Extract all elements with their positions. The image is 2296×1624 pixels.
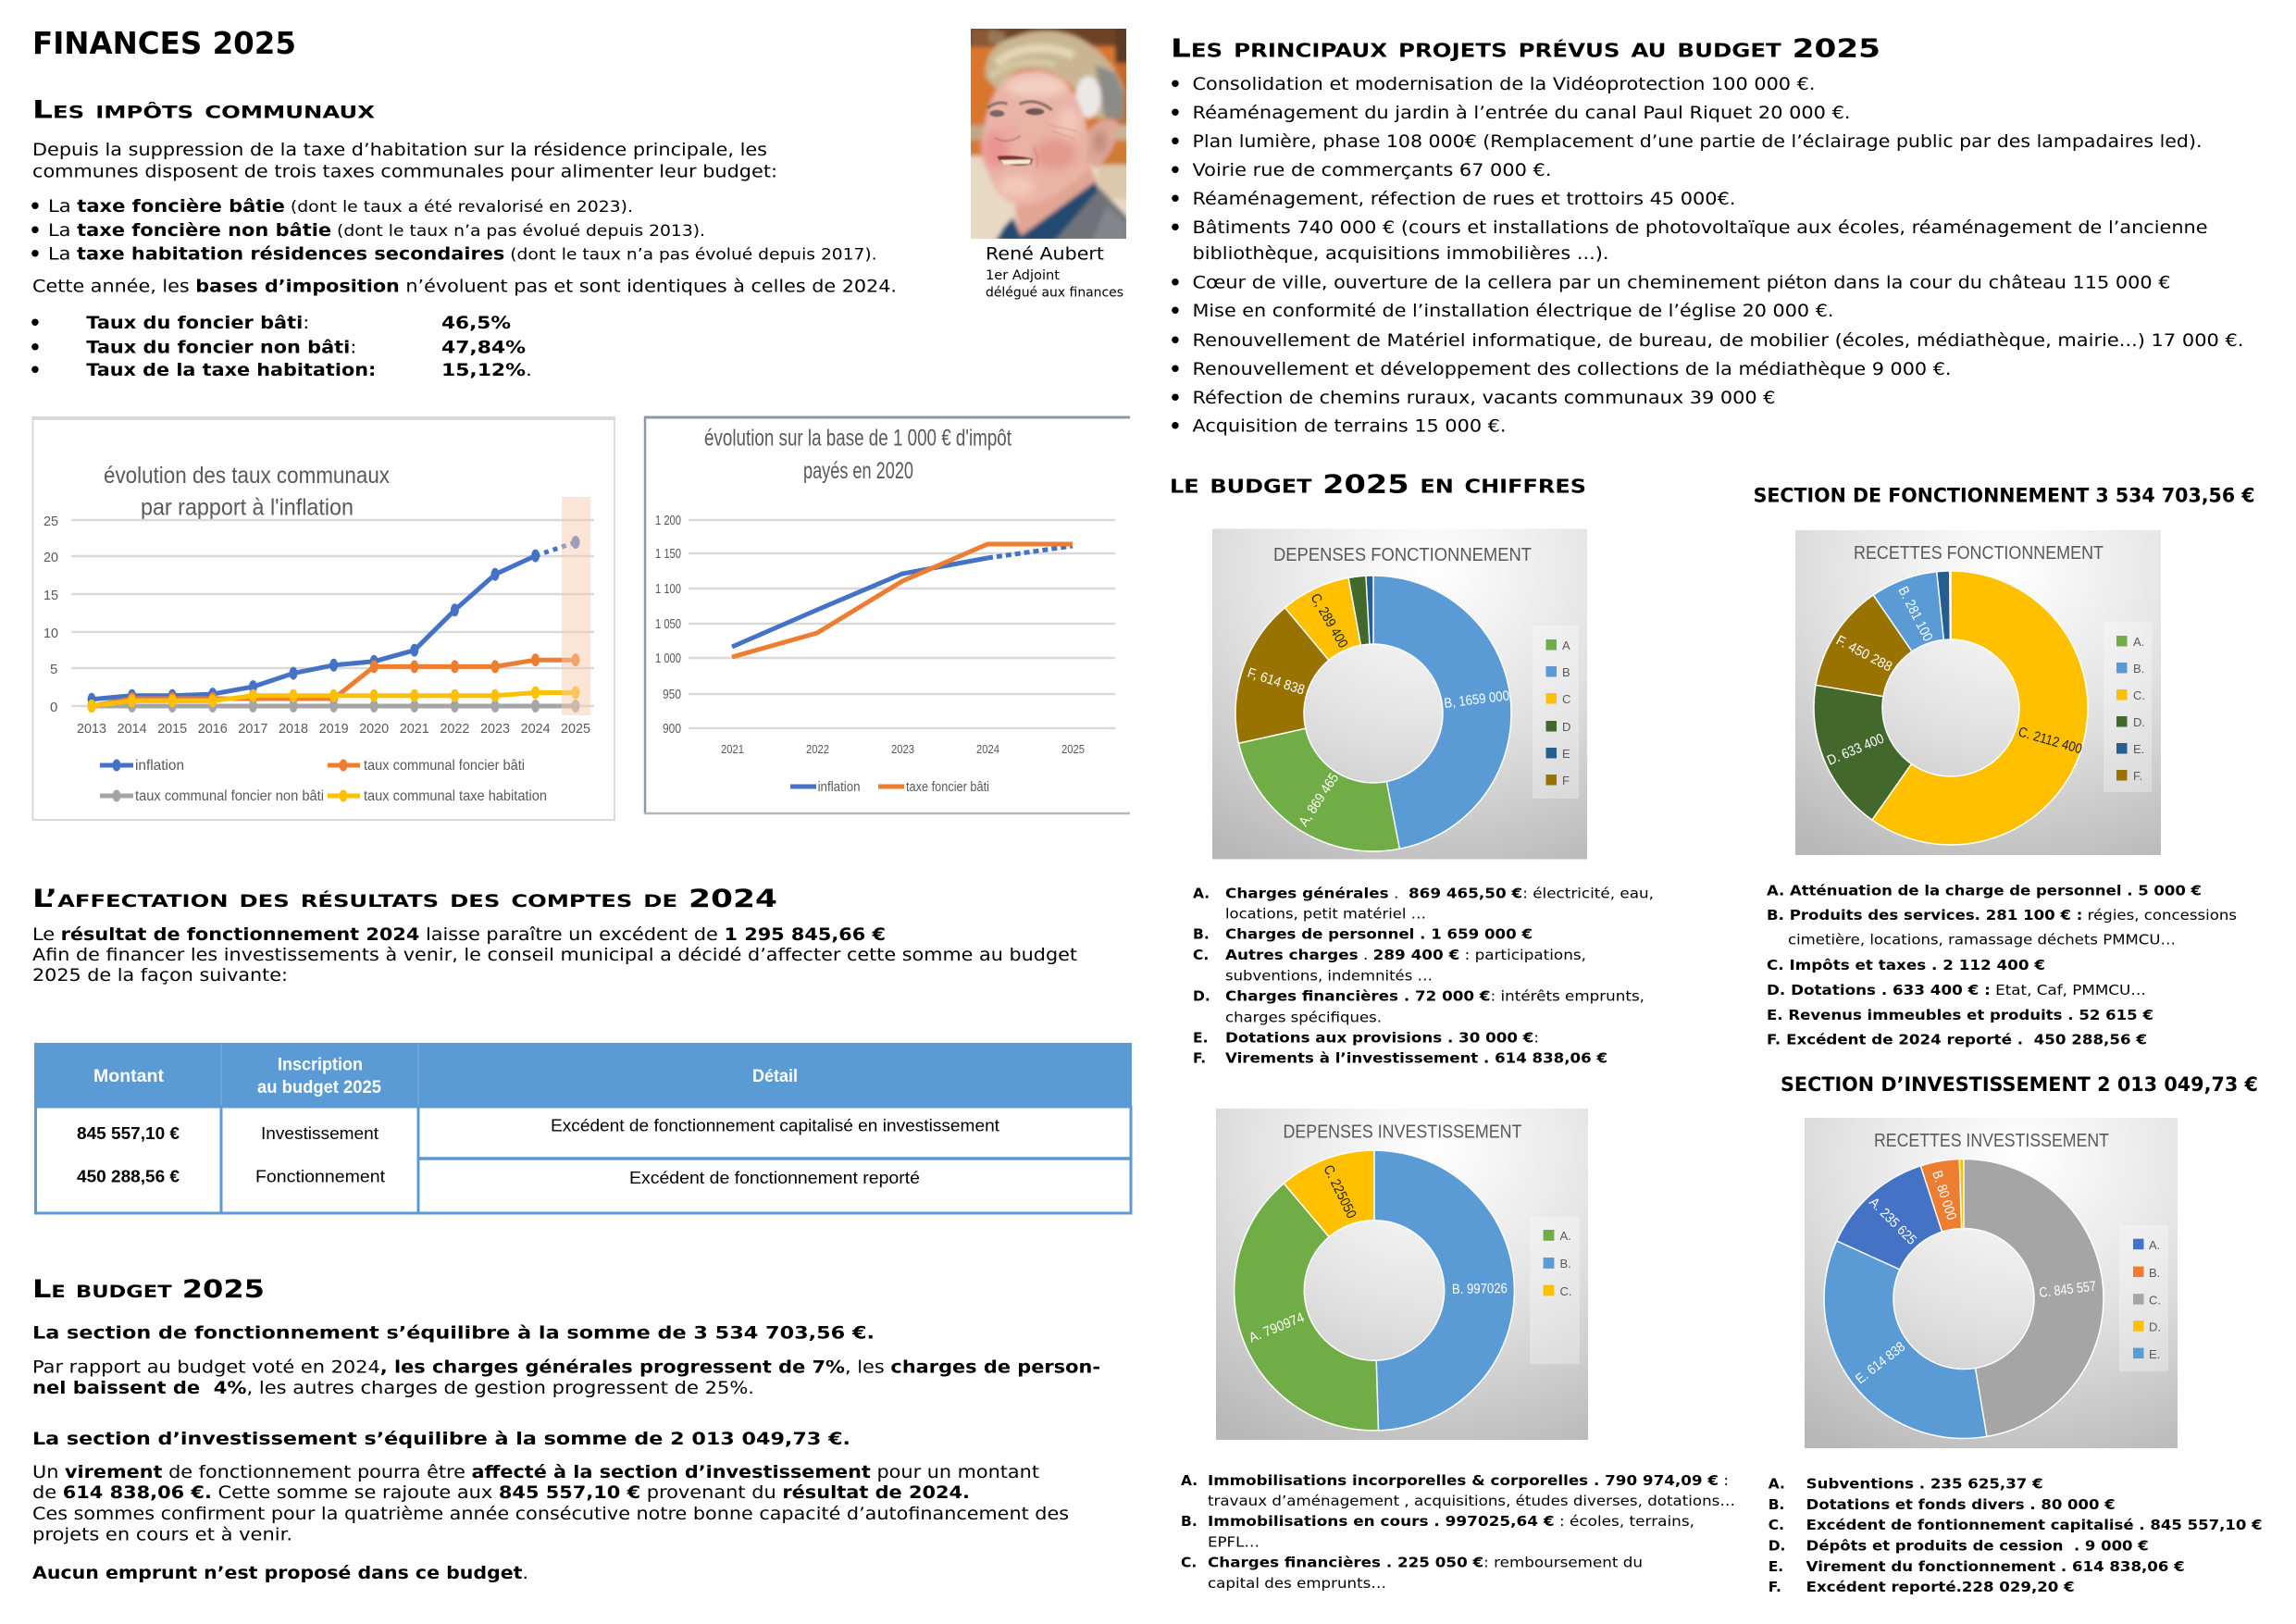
y axis labels: 1 150	[655, 546, 681, 562]
x axis labels: 2024	[976, 742, 999, 756]
x axis labels: 2022	[440, 721, 469, 737]
photo caption: délégué aux finances	[986, 285, 1123, 300]
data labels	[1825, 584, 2084, 769]
projects list: Renouvellement et développement des collections de la médiathèque 9 000 €.	[1192, 359, 1951, 379]
intro text: Depuis la suppression de la taxe d’habitation sur la résidence principale, les	[32, 140, 767, 160]
x axis labels: 2018	[279, 721, 308, 737]
projects list: Consolidation et modernisation de la Vidéoprotection 100 000 €.	[1192, 74, 1816, 94]
table: affectation	[34, 1043, 1132, 1213]
tax rates: Taux du foncier non bâti :	[86, 338, 356, 358]
tax rates: Taux du foncier bâti :	[86, 313, 309, 333]
projects list: Acquisition de terrains 15 000 €.	[1192, 416, 1507, 437]
list: recettes fonctionnement: F. Excédent de 2024 reporté . 450 288,56 €	[1767, 1031, 2147, 1048]
projects list: Mise en conformité de l’installation électrique de l’église 20 000 €.	[1192, 301, 1834, 321]
legend: A.	[1560, 1229, 1571, 1243]
projects list: Renouvellement de Matériel informatique, de bureau, de mobilier (écoles, médiathèque, mairie...) 17 000 €.	[1192, 330, 2243, 351]
list: recettes fonctionnement	[1767, 883, 2237, 1048]
data labels: A, 869 465	[1296, 771, 1342, 829]
bases d'imposition text: Cette année, les bases d’imposition n’évoluent pas et sont identiques à celles de 2024.	[32, 276, 897, 296]
legend: C	[1562, 692, 1570, 706]
chart legend: taux communal foncier non bâti	[135, 788, 324, 804]
chart legend	[790, 779, 989, 795]
tax rates: 15,12% .	[441, 360, 532, 380]
data labels	[1247, 1162, 1508, 1346]
legend: D.	[2149, 1320, 2161, 1334]
donut segments	[1848, 605, 2054, 811]
x axis labels: 2023	[891, 742, 914, 756]
y axis labels: 0	[50, 700, 57, 715]
legend: A	[1562, 638, 1570, 652]
legend: F	[1562, 774, 1570, 787]
list: recettes investissement: A.	[1769, 1475, 1785, 1492]
paragraph	[32, 924, 1077, 986]
legend: B.	[2149, 1266, 2160, 1280]
list: depenses investissement: C.	[1181, 1555, 1197, 1571]
x axis labels: 2014	[118, 721, 147, 737]
data labels	[1246, 590, 1510, 829]
list: depenses fonctionnement: A.	[1193, 885, 1210, 901]
heading: le budget 2025 en chiffres: le budget 2025 en chiffres	[1170, 468, 1586, 500]
data labels: E. 614 838	[1853, 1339, 1908, 1387]
projects list: Réaménagement du jardin à l’entrée du canal Paul Riquet 20 000 €.	[1192, 103, 1851, 123]
y axis labels: 25	[43, 514, 58, 529]
projects list: •	[1168, 215, 1183, 242]
row 2: Fonctionnement	[255, 1168, 385, 1186]
chart legend: taux communal foncier bâti	[364, 758, 525, 774]
legend	[1530, 1217, 1580, 1364]
tax rates: •	[28, 357, 43, 385]
closing statement: Aucun emprunt n’est proposé dans ce budget .	[32, 1563, 528, 1583]
list of three taxes: La taxe habitation résidences secondaires (dont le taux n’a pas évolué depuis 2017).	[48, 244, 877, 265]
chart: évolution sur la base de 1 000 €	[644, 416, 1130, 814]
data labels: F. 450 288	[1833, 633, 1894, 676]
photo caption: 1er Adjoint	[986, 268, 1061, 283]
list: depenses fonctionnement	[1193, 885, 1654, 1066]
heading: section de fonctionnement: SECTION DE FONCTIONNEMENT 3 534 703,56 €	[1754, 485, 2255, 507]
face shading	[983, 76, 1105, 197]
y axis labels: 1 050	[655, 616, 681, 632]
list: recettes investissement: Virement du fonctionnement . 614 838,06 €	[1806, 1558, 2185, 1575]
projects list: •	[1168, 328, 1183, 355]
paragraph investissement: projets en cours et à venir.	[32, 1525, 292, 1545]
list: recettes investissement: Excédent reporté.228 029,20 €	[1806, 1579, 2075, 1595]
section: l'affectation des résultats	[32, 885, 1077, 986]
data labels: B. 80 000	[1929, 1169, 1959, 1222]
intro text: communes disposent de trois taxes communales pour alimenter leur budget:	[32, 161, 777, 181]
list: depenses fonctionnement: E.	[1193, 1029, 1208, 1046]
legend: B.	[2133, 662, 2144, 676]
list: recettes fonctionnement: D. Dotations . 633 400 € : Etat, Caf, PMMCU…	[1767, 982, 2146, 998]
list: recettes investissement	[1769, 1475, 2263, 1595]
data labels: F, 614 838	[1246, 665, 1307, 699]
x axis labels: 2024	[521, 721, 551, 737]
paragraph fonctionnement: Par rapport au budget voté en 2024 , les charges générales progressent de 7% , les charges de person-	[32, 1357, 1100, 1377]
list: depenses fonctionnement: Charges générales . 869 465,50 € : électricité, eau,	[1225, 885, 1654, 901]
chart legend: taux communal taxe habitation	[364, 788, 547, 804]
tax rates: •	[28, 310, 43, 338]
panel: recettes fonctionnement donut	[1795, 530, 2161, 855]
chart title: RECETTES FONCTIONNEMENT	[1854, 543, 2104, 564]
list: recettes fonctionnement: B. Produits des services. 281 100 € : régies, concessions	[1767, 907, 2237, 924]
chart title: par rapport à l'inflation	[141, 495, 354, 521]
legend: C.	[2149, 1294, 2161, 1307]
legend: B.	[1560, 1257, 1571, 1271]
legend: A.	[2149, 1238, 2160, 1252]
x axis labels: 2025	[1061, 742, 1085, 756]
chart title	[104, 463, 390, 521]
row 2: 450 288,56 €	[77, 1168, 180, 1186]
y axis labels: 20	[43, 550, 58, 565]
legend: D.	[2133, 715, 2145, 729]
tax rates	[28, 310, 532, 385]
data labels: D. 633 400	[1825, 731, 1886, 769]
legend	[2104, 622, 2152, 792]
y axis labels: 10	[43, 626, 58, 641]
legend: F.	[2133, 769, 2142, 783]
x axis labels: 2013	[77, 721, 106, 737]
x axis labels: 2016	[198, 721, 228, 737]
chart legend: inflation	[818, 779, 861, 795]
list: depenses investissement: B.	[1181, 1513, 1198, 1530]
projects list: •	[1168, 71, 1183, 99]
x axis labels: 2022	[806, 742, 829, 756]
list: depenses fonctionnement: B.	[1193, 925, 1210, 942]
line: taux communal taxe habitation	[92, 692, 576, 706]
list: recettes investissement: B.	[1769, 1496, 1784, 1513]
list: recettes investissement: Dotations et fonds divers . 80 000 €	[1806, 1496, 2116, 1513]
line: inflation	[92, 542, 576, 700]
tax rates: Taux de la taxe habitation:	[86, 360, 376, 380]
line: taux communal foncier non bâti	[92, 703, 576, 709]
row 1: 845 557,10 €	[77, 1124, 180, 1143]
legend: D	[1562, 720, 1570, 734]
projects list: •	[1168, 129, 1183, 156]
x axis labels: 2025	[561, 721, 590, 737]
y axis labels: 1 100	[655, 581, 681, 597]
tax rates: 46,5%	[441, 313, 511, 333]
x axis labels: 2023	[480, 721, 510, 737]
legend: E.	[2133, 742, 2144, 756]
paragraph fonctionnement: nel baissent de 4% , les autres charges de gestion progressent de 25%.	[32, 1378, 754, 1398]
list: depenses investissement	[1181, 1472, 1735, 1592]
legend: A.	[2133, 635, 2144, 649]
list: depenses fonctionnement: Autres charges . 289 400 € : participations,	[1225, 947, 1586, 963]
table header	[34, 1043, 1132, 1107]
legend: E	[1562, 747, 1570, 761]
row 1: Excédent de fonctionnement capitalisé en investissement	[551, 1116, 999, 1134]
projects list	[1168, 71, 2243, 440]
list: depenses fonctionnement: locations, petit matériel …	[1225, 905, 1426, 922]
y axis labels	[43, 514, 58, 715]
chart legend	[100, 758, 547, 804]
x axis labels: 2015	[157, 721, 187, 737]
projects list: •	[1168, 157, 1183, 185]
projects list: •	[1168, 100, 1183, 128]
paragraph investissement: de 614 838,06 €. Cette somme se rajoute aux 845 557,10 € provenant du résultat de 2024.	[32, 1482, 970, 1503]
x axis labels	[721, 742, 1085, 756]
data labels: A. 790974	[1247, 1309, 1307, 1346]
paragraph: 2025 de la façon suivante:	[32, 965, 288, 986]
y axis labels: 5	[50, 662, 57, 677]
tax rates: 47,84%	[441, 338, 526, 358]
section: les principaux projets	[1168, 33, 2243, 440]
table header: Inscription	[278, 1056, 363, 1075]
panel: depenses fonctionnement donut	[1212, 529, 1587, 859]
chart title	[704, 426, 1011, 484]
legend: E.	[2149, 1347, 2160, 1361]
list: depenses investissement: capital des emprunts…	[1208, 1575, 1386, 1592]
projects list: Voirie rue de commerçants 67 000 €.	[1192, 160, 1551, 180]
heading: L’affectation des résultats des comptes de 2024	[32, 885, 777, 913]
list: depenses investissement: EPFL…	[1208, 1534, 1260, 1551]
data labels: C, 289 400	[1308, 590, 1351, 651]
list of three taxes: •	[28, 193, 43, 221]
y axis labels: 1 200	[655, 513, 681, 528]
heading: Les principaux projets prévus au budget 2025	[1171, 33, 1880, 63]
list: recettes fonctionnement: A. Atténuation de la charge de personnel . 5 000 €	[1767, 883, 2202, 899]
list: depenses investissement: Charges financières . 225 050 € : remboursement du	[1208, 1555, 1643, 1571]
data labels: B. 281 100	[1894, 584, 1936, 644]
data labels: C. 845 557	[2038, 1279, 2097, 1301]
list: depenses fonctionnement: Charges financières . 72 000 € : intérêts emprunts,	[1225, 988, 1644, 1005]
face details	[987, 102, 1076, 168]
paragraph investissement: Un virement de fonctionnement pourra être affecté à la section d’investissement pour un montant	[32, 1462, 1039, 1482]
list: depenses investissement: Immobilisations incorporelles & corporelles . 790 974,09 € :	[1208, 1472, 1729, 1489]
projects list: bibliothèque, acquisitions immobilières ...).	[1192, 243, 1608, 264]
list: recettes fonctionnement: C. Impôts et taxes . 2 112 400 €	[1767, 957, 2045, 973]
list of three taxes: •	[28, 217, 43, 245]
line: taux communal foncier bâti	[92, 660, 576, 706]
x axis labels: 2019	[319, 721, 349, 737]
list: depenses investissement: travaux d’aménagement , acquisitions, études diverses, dotations…	[1208, 1493, 1735, 1509]
list: recettes investissement: F.	[1769, 1579, 1781, 1595]
data labels	[1853, 1169, 2097, 1387]
projects list: •	[1168, 270, 1183, 298]
paragraph: Le résultat de fonctionnement 2024 laisse paraître un excédent de 1 295 845,66 €	[32, 924, 886, 945]
list: depenses fonctionnement: Virements à l’investissement . 614 838,06 €	[1225, 1049, 1607, 1066]
photo caption	[986, 244, 1123, 300]
row 2: Excédent de fonctionnement reporté	[629, 1169, 920, 1187]
2025 highlight band	[562, 497, 590, 715]
data labels: C. 2112 400	[2017, 725, 2084, 757]
chart title: RECETTES INVESTISSEMENT	[1874, 1131, 2109, 1151]
list: recettes fonctionnement: E. Revenus immeubles et produits . 52 615 €	[1767, 1007, 2153, 1023]
list: depenses fonctionnement: Dotations aux provisions . 30 000 € :	[1225, 1029, 1539, 1046]
photo: René Aubert portrait	[971, 29, 1126, 239]
legend	[2119, 1225, 2168, 1371]
heading: section d'investissement: SECTION D’INVESTISSEMENT 2 013 049,73 €	[1781, 1073, 2258, 1096]
projects list: •	[1168, 413, 1183, 440]
projects list: Bâtiments 740 000 € (cours et installations de photovoltaïque aux écoles, réaménagement de l’ancienne	[1192, 217, 2208, 238]
list: recettes investissement: D.	[1769, 1538, 1785, 1555]
section: le budget 2025	[32, 1275, 1100, 1583]
list: depenses investissement: Immobilisations en cours . 997025,64 € : écoles, terrains,	[1208, 1513, 1694, 1530]
y axis labels: 15	[43, 588, 58, 603]
line: inflation	[732, 546, 1073, 647]
list: depenses fonctionnement: D.	[1193, 988, 1210, 1005]
legend: B	[1562, 665, 1570, 679]
paragraph: Afin de financer les investissements à venir, le conseil municipal a décidé d’affecter cette somme au budget	[32, 945, 1077, 965]
donut segments	[1270, 610, 1477, 817]
legend: C.	[2133, 688, 2145, 702]
list: recettes investissement: C.	[1769, 1517, 1784, 1533]
list: depenses fonctionnement: Charges de personnel . 1 659 000 €	[1225, 925, 1533, 942]
list: recettes investissement: Subventions . 235 625,37 €	[1806, 1475, 2043, 1492]
list of three taxes: La taxe foncière non bâtie (dont le taux n’a pas évolué depuis 2013).	[48, 220, 705, 241]
subheading investissement: La section d’investissement s’équilibre à la somme de 2 013 049,73 €.	[32, 1429, 850, 1449]
paragraph fonctionnement	[32, 1357, 1100, 1398]
list of three taxes: •	[28, 241, 43, 268]
list: depenses investissement: A.	[1181, 1472, 1198, 1489]
legend: C.	[1560, 1284, 1571, 1298]
page title: FINANCES 2025	[32, 25, 296, 61]
row 1	[77, 1116, 999, 1143]
chart title: DEPENSES FONCTIONNEMENT	[1273, 545, 1532, 565]
chart title: DEPENSES INVESTISSEMENT	[1283, 1122, 1521, 1142]
list: recettes investissement: E.	[1769, 1558, 1783, 1575]
paragraph investissement	[32, 1462, 1069, 1545]
panel: recettes investissement donut	[1805, 1118, 2178, 1448]
subheading fonctionnement: La section de fonctionnement s’équilibre à la somme de 3 534 703,56 €.	[32, 1323, 875, 1344]
heading: Le budget 2025	[32, 1275, 265, 1304]
projects list: Réfection de chemins ruraux, vacants communaux 39 000 €	[1192, 388, 1775, 408]
donut segments	[1270, 1185, 1479, 1395]
x axis labels: 2020	[359, 721, 389, 737]
x axis labels: 2021	[721, 742, 744, 756]
data labels: B, 1659 000	[1443, 688, 1510, 712]
table header: Montant	[93, 1067, 165, 1086]
y axis labels: 950	[663, 687, 681, 702]
data labels: B. 997026	[1452, 1281, 1508, 1297]
section: les impôts communaux	[28, 96, 897, 385]
chart legend: taxe foncier bâti	[906, 779, 989, 795]
chart title: payés en 2020	[803, 458, 913, 484]
panel: depenses investissement donut	[1216, 1109, 1588, 1440]
legend	[1533, 626, 1579, 799]
projects list: Réaménagement, réfection de rues et trottoirs 45 000€.	[1192, 189, 1736, 209]
projects list: •	[1168, 186, 1183, 214]
projects list: •	[1168, 356, 1183, 384]
projects list: •	[1168, 298, 1183, 326]
x axis labels: 2017	[238, 721, 267, 737]
projects list: Cœur de ville, ouverture de la cellera par un cheminement piéton dans la cour du château 115 000 €	[1192, 272, 2171, 292]
y axis labels: 1 000	[655, 651, 681, 666]
intro text	[32, 140, 777, 181]
table header: au budget 2025	[257, 1078, 381, 1097]
line: taxe foncier bâti	[732, 544, 1073, 657]
list: recettes fonctionnement: cimetière, locations, ramassage déchets PMMCU…	[1788, 931, 2176, 948]
chart: évolution des taux communaux	[32, 416, 615, 820]
row 1: Investissement	[261, 1124, 379, 1143]
y axis labels: 900	[663, 721, 681, 737]
list of three taxes: La taxe foncière bâtie (dont le taux a été revalorisé en 2023).	[48, 196, 633, 217]
list: depenses fonctionnement: charges spécifiques.	[1225, 1009, 1382, 1025]
tax rates: •	[28, 335, 43, 363]
list: depenses fonctionnement: subventions, indemnités …	[1225, 968, 1433, 985]
x axis labels	[77, 721, 590, 737]
y axis labels	[655, 513, 681, 737]
data labels: C. 225050	[1320, 1162, 1359, 1221]
list: depenses fonctionnement: C.	[1193, 947, 1209, 963]
list of three taxes	[28, 193, 877, 268]
projects list: Plan lumière, phase 108 000€ (Remplacement d’une partie de l’éclairage public par des lampadaires led).	[1192, 131, 2203, 152]
table header: Détail	[752, 1067, 798, 1086]
list: recettes investissement: Excédent de fontionnement capitalisé . 845 557,10 €	[1806, 1517, 2263, 1533]
chart title: évolution sur la base de 1 000 € d'impôt	[704, 426, 1011, 452]
photo caption: René Aubert	[986, 244, 1104, 265]
projects list: •	[1168, 385, 1183, 413]
chart title: évolution des taux communaux	[104, 463, 390, 489]
list: depenses fonctionnement: F.	[1193, 1049, 1206, 1066]
chart legend: inflation	[135, 758, 184, 774]
heading: Les impôts communaux	[32, 96, 375, 124]
data labels: A. 235 625	[1866, 1195, 1919, 1248]
list: recettes investissement: Dépôts et produits de cession . 9 000 €	[1806, 1538, 2149, 1555]
paragraph investissement: Ces sommes confirment pour la quatrième année consécutive notre bonne capacité d’autofinancement des	[32, 1504, 1069, 1524]
donut segments	[1858, 1194, 2069, 1404]
row 2	[77, 1168, 920, 1187]
x axis labels: 2021	[400, 721, 429, 737]
